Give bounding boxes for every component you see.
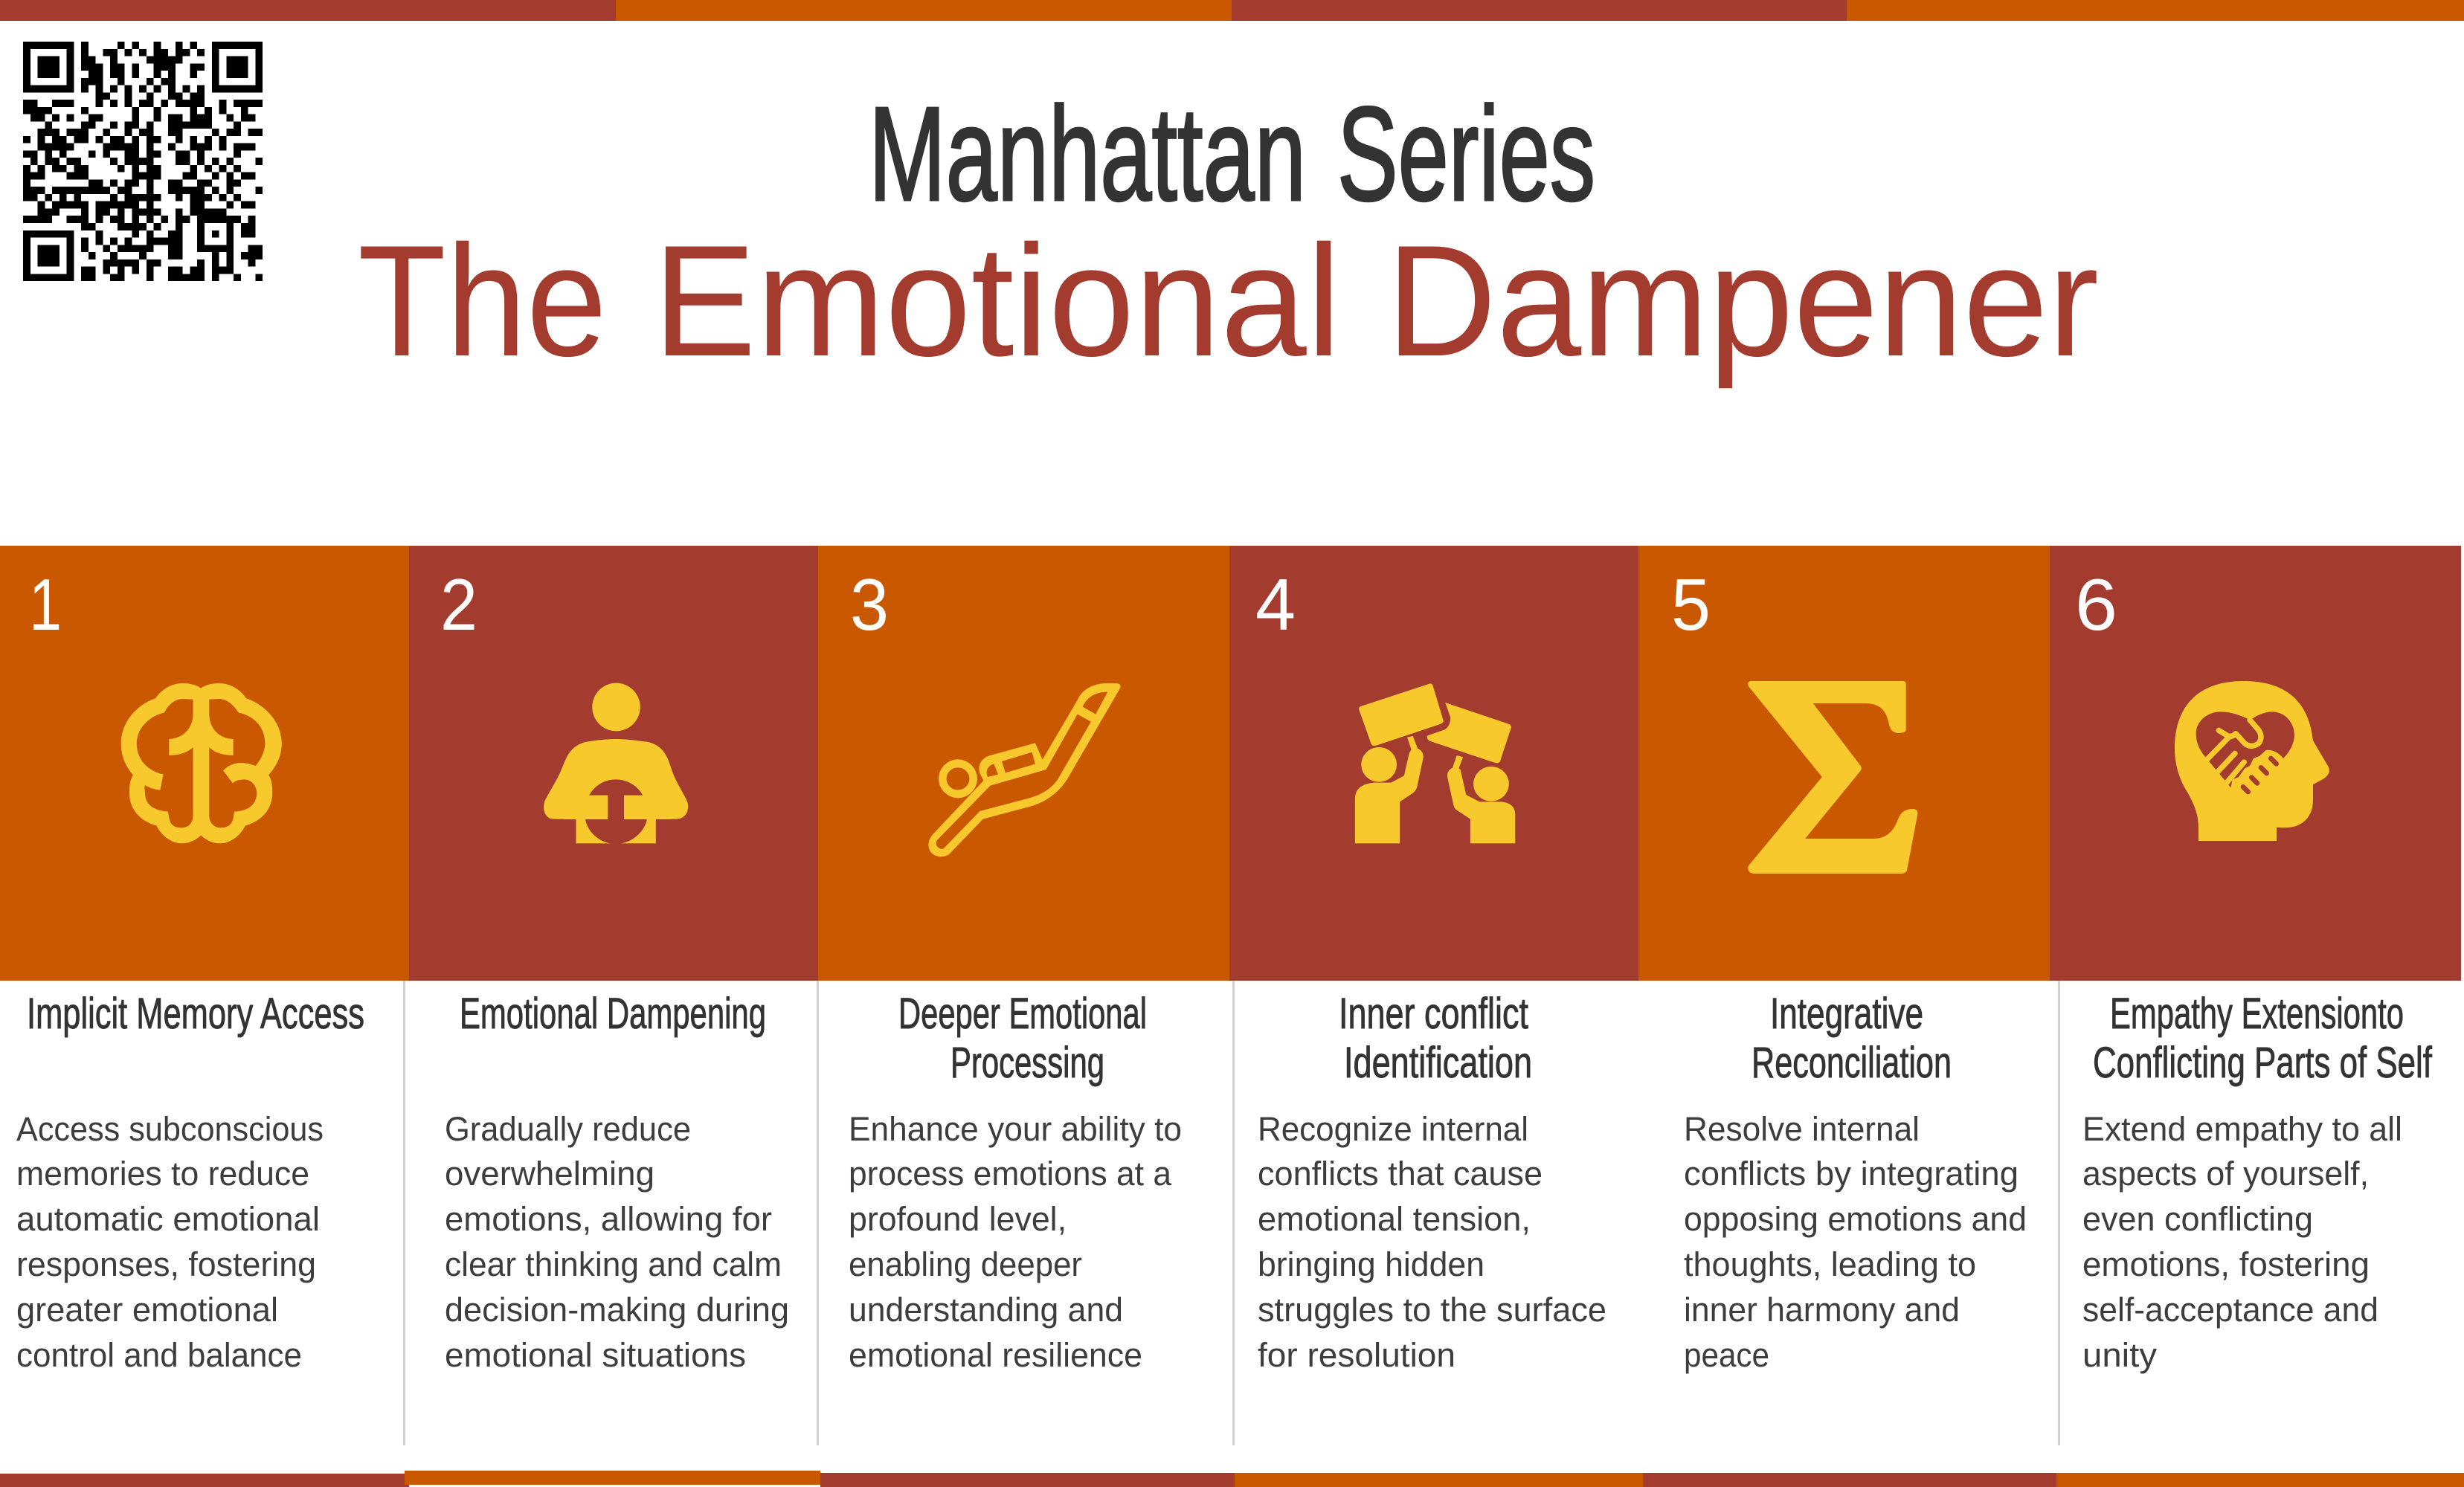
description 5: inner harmony and — [1684, 1291, 1960, 1329]
description 4: conflicts that cause — [1258, 1155, 1543, 1193]
description 1: greater emotional — [16, 1291, 278, 1329]
description 2: Gradually reduce — [445, 1110, 691, 1148]
description 1: responses, fostering — [16, 1245, 316, 1283]
main title: Emotional — [653, 213, 1341, 390]
description 3: process emotions at a — [849, 1155, 1172, 1193]
description 3: understanding and — [849, 1291, 1123, 1329]
description 1: Access subconscious — [16, 1110, 324, 1148]
description 6: unity — [2082, 1336, 2158, 1374]
step number 5: 5 — [1671, 564, 1711, 645]
heading 3 — [898, 990, 1147, 1087]
heading 2: Emotional Dampening — [460, 990, 766, 1038]
panel: step 3 — [818, 546, 1229, 1374]
description 3: Enhance your ability to — [849, 1110, 1182, 1148]
description 6: even conflicting — [2082, 1200, 2313, 1238]
description 2: decision-making during — [445, 1291, 789, 1329]
description 5: Resolve internal — [1684, 1110, 1920, 1148]
description 1: automatic emotional — [16, 1200, 320, 1238]
description 3: profound level, — [849, 1200, 1067, 1238]
main title: The — [358, 213, 607, 390]
step number 1: 1 — [29, 564, 62, 645]
top color bar — [0, 0, 2464, 21]
description 4: for resolution — [1258, 1336, 1455, 1374]
description 4: Recognize internal — [1258, 1110, 1528, 1148]
bottom color bar — [0, 1471, 2464, 1487]
description 4: bringing hidden — [1258, 1245, 1484, 1283]
heading 4: Inner conflict — [1339, 990, 1528, 1038]
icon: two people holding signs — [1355, 683, 1515, 843]
heading 5: Integrative — [1770, 990, 1923, 1038]
description 6 — [2082, 1110, 2402, 1374]
description 1: memories to reduce — [16, 1155, 309, 1193]
description 2: emotions, allowing for — [445, 1200, 772, 1238]
panel: step 1 — [0, 546, 409, 1374]
description 3: emotional resilience — [849, 1336, 1142, 1374]
description 2: emotional situations — [445, 1336, 746, 1374]
panel: step 2 — [409, 546, 818, 1374]
step number 3: 3 — [850, 564, 889, 645]
description 6: self-acceptance and — [2082, 1291, 2378, 1329]
main title: Dampener — [1386, 213, 2099, 390]
icon: sigma — [1748, 681, 1917, 874]
tile 5 background — [1638, 546, 2050, 981]
heading 3: Processing — [950, 1039, 1104, 1087]
heading 6 — [2093, 990, 2433, 1087]
description 2: overwhelming — [445, 1155, 654, 1193]
series heading: Manhattan — [869, 80, 1306, 229]
heading 1: Implicit Memory Access — [27, 990, 364, 1038]
tile 1 background — [0, 546, 409, 981]
tile 2 background — [409, 546, 818, 981]
description 6: aspects of yourself, — [2082, 1155, 2369, 1193]
heading 3: Deeper Emotional — [898, 990, 1147, 1038]
description 2 — [445, 1110, 789, 1374]
description 2: clear thinking and calm — [445, 1245, 782, 1283]
description 3: enabling deeper — [849, 1245, 1082, 1283]
description 5: thoughts, leading to — [1684, 1245, 1976, 1283]
description 3 — [849, 1110, 1182, 1374]
tile 4 background — [1229, 546, 1638, 981]
description 5 — [1684, 1110, 2027, 1374]
icon: brain — [121, 683, 282, 843]
tile 6 background — [2050, 546, 2461, 981]
description 5: opposing emotions and — [1684, 1200, 2027, 1238]
heading 4 — [1339, 990, 1532, 1087]
panel: step 4 — [1229, 546, 1638, 1374]
description 5: conflicts by integrating — [1684, 1155, 2019, 1193]
QR code — [23, 42, 263, 281]
heading 5: Reconciliation — [1752, 1039, 1952, 1087]
main title — [358, 213, 2099, 390]
heading 4: Identification — [1344, 1039, 1532, 1087]
description 1: control and balance — [16, 1336, 302, 1374]
tile 3 background — [818, 546, 1229, 981]
icon: head with handshake heart — [2175, 681, 2329, 841]
description 4: emotional tension, — [1258, 1200, 1531, 1238]
description 1 — [16, 1110, 324, 1374]
description 5: peace — [1684, 1336, 1769, 1374]
heading 5 — [1752, 990, 1952, 1087]
icon: reclining chair — [928, 683, 1121, 857]
panel: step 6 — [2050, 546, 2461, 1374]
series heading: Series — [1337, 80, 1595, 229]
step number 6: 6 — [2075, 564, 2117, 645]
description 4: struggles to the surface — [1258, 1291, 1606, 1329]
description 6: emotions, fostering — [2082, 1245, 2370, 1283]
description 4 — [1258, 1110, 1606, 1374]
panel: step 5 — [1638, 546, 2050, 1374]
description 6: Extend empathy to all — [2082, 1110, 2402, 1148]
step number 4: 4 — [1255, 564, 1296, 645]
icon: person holding child — [544, 683, 688, 843]
step number 2: 2 — [440, 564, 477, 645]
